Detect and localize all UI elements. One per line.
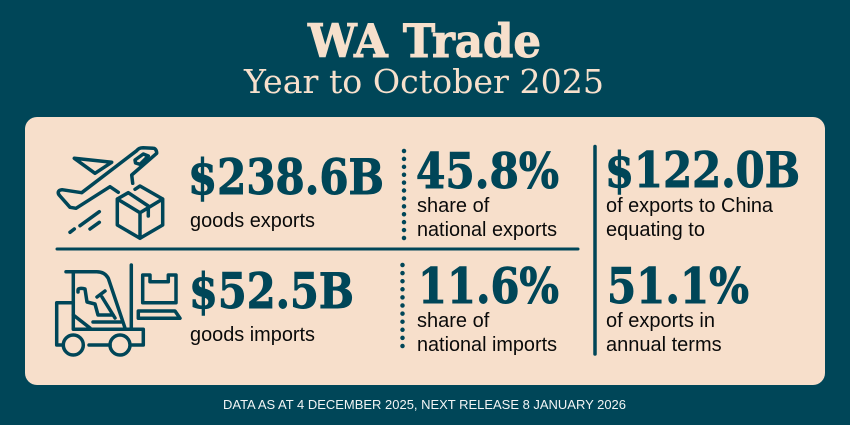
stat: exports to China: equating to xyxy=(606,219,705,241)
title: WA Trade xyxy=(307,14,541,68)
stat: goods exports: $238.6B xyxy=(188,148,384,206)
stat: share of national exports: 45.8% xyxy=(416,142,559,200)
dotted separator top xyxy=(402,151,406,238)
stat: exports to China xyxy=(605,141,800,241)
stat: exports to China: $122.0B xyxy=(605,141,800,199)
stat: share of national imports: 11.6% xyxy=(418,257,559,315)
stat: goods imports: $52.5B xyxy=(189,262,354,320)
stat: share of national exports: national exports xyxy=(417,219,557,241)
stat: exports in annual terms xyxy=(606,257,749,356)
icon: forklift xyxy=(57,265,180,355)
stat: exports in annual terms: 51.1% xyxy=(607,257,749,315)
divider xyxy=(57,248,578,250)
icon: plane and parcel xyxy=(58,148,163,238)
stat: goods exports: goods exports xyxy=(190,210,315,232)
stat: exports in annual terms: of exports in xyxy=(606,310,715,332)
vertical separator xyxy=(593,146,597,354)
stat: goods imports xyxy=(189,262,354,346)
dotted separator bottom xyxy=(400,265,405,346)
stat: share of national imports: national imports xyxy=(417,334,557,356)
stat: share of national exports: share of xyxy=(417,195,490,217)
footer note: DATA AS AT 4 DECEMBER 2025, NEXT RELEASE 8 JANUARY 2026 xyxy=(223,398,626,412)
stat: share of national imports: share of xyxy=(417,310,490,332)
stat: share of national exports xyxy=(416,142,559,241)
stat: goods imports: goods imports xyxy=(190,324,315,346)
stat: exports in annual terms: annual terms xyxy=(606,334,722,356)
panel: trade figures xyxy=(25,117,825,385)
stat: share of national imports xyxy=(417,257,559,356)
stat: goods exports xyxy=(188,148,384,232)
subtitle: Year to October 2025 xyxy=(243,62,604,101)
stat: exports to China: of exports to China xyxy=(606,195,774,217)
